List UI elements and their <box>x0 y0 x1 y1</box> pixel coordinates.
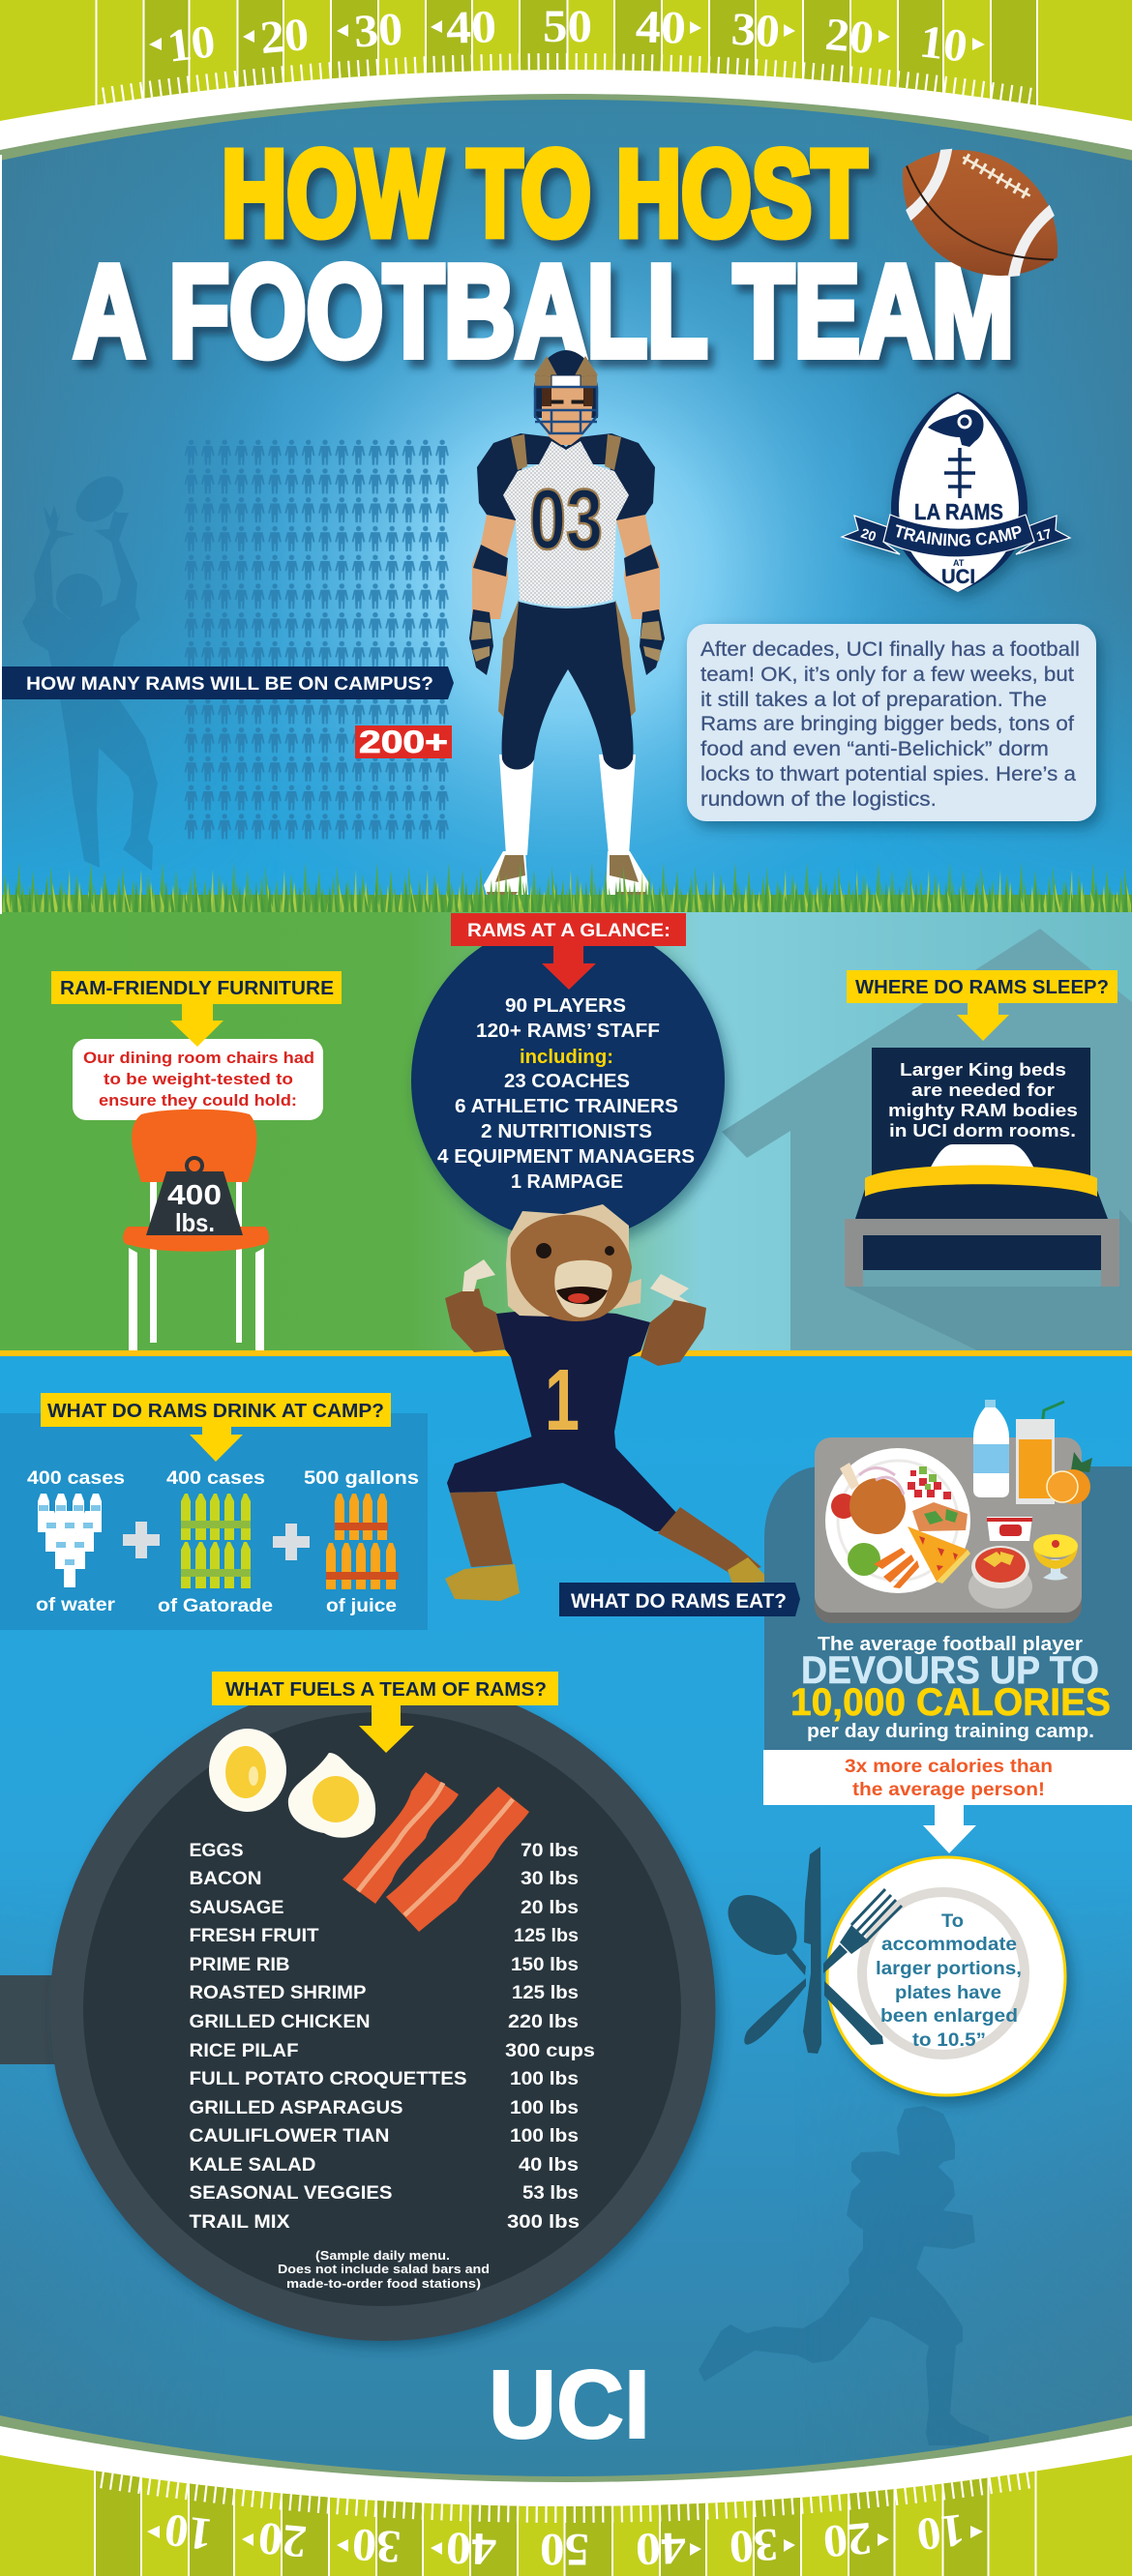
legs <box>447 1436 680 1531</box>
food list names: BACON <box>190 1869 261 1889</box>
onions <box>859 1468 904 1495</box>
fork tines <box>851 1889 902 1940</box>
pants <box>498 600 636 770</box>
chair text: ensure they could hold: <box>99 1091 297 1110</box>
labels top: 500 gallons <box>304 1468 419 1489</box>
food list names: FRESH FRUIT <box>190 1926 319 1946</box>
orange slice <box>1047 1471 1078 1502</box>
right arm <box>640 1298 706 1366</box>
heading <box>212 1672 558 1705</box>
arrow <box>359 1705 414 1753</box>
glance list: 1 RAMPAGE <box>511 1171 623 1193</box>
house silhouette <box>722 929 1132 1350</box>
bone <box>840 1463 859 1490</box>
fork head <box>840 1925 869 1954</box>
right glove <box>640 609 665 675</box>
food list amounts: 100 lbs <box>510 2098 579 2118</box>
panel: what do rams drink <box>0 1393 428 1630</box>
menu note: Does not include salad bars and <box>278 2262 490 2276</box>
panel: ram-friendly furniture: RAM-FRIENDLY FURNITURE <box>60 978 334 999</box>
badge label: AT: AT <box>953 558 965 568</box>
icon: cutlery <box>717 1847 902 2054</box>
header: rams at a glance: RAMS AT A GLANCE: <box>467 921 670 941</box>
food list amounts: 53 lbs <box>522 2183 579 2204</box>
panel: where do rams sleep: WHERE DO RAMS SLEEP? <box>855 977 1109 998</box>
divider: gold line <box>0 1350 1132 1356</box>
plate text: larger portions, <box>876 1959 1022 1979</box>
food list amounts: 100 lbs <box>510 2069 579 2089</box>
heading <box>847 970 1117 1003</box>
food list names: TRAIL MIX <box>190 2212 290 2233</box>
dessert cup <box>1033 1548 1078 1569</box>
footer: field and arcs <box>0 2415 1132 2576</box>
football laces emblem <box>944 448 975 498</box>
sauce lid <box>987 1518 1032 1522</box>
weight <box>146 1158 243 1237</box>
silhouette: player catching ball <box>22 467 158 871</box>
text block: intro: team! OK, it’s only for a few weeks, but <box>700 664 1074 686</box>
skewers <box>908 1470 951 1499</box>
banner: what do rams eat: WHAT DO RAMS EAT? <box>571 1590 787 1613</box>
menu note: made-to-order food stations) <box>286 2276 481 2291</box>
speech box <box>73 1039 323 1120</box>
orange <box>1056 1469 1090 1504</box>
tomato <box>831 1494 856 1519</box>
plate text: To <box>941 1911 964 1932</box>
panel: what fuels a team of rams <box>0 1672 716 2341</box>
logo: UCI: UCI <box>489 2351 650 2459</box>
plate text: accommodate <box>881 1935 1017 1955</box>
banner: what do rams eat <box>559 1583 800 1616</box>
text block: intro: food and even “anti-Belichick” dorm <box>700 738 1049 760</box>
food list amounts: 300 lbs <box>507 2212 580 2233</box>
eat text: The average football player <box>818 1634 1083 1655</box>
food list amounts: 30 lbs <box>521 1869 579 1889</box>
skewers greens <box>919 1466 937 1490</box>
heading <box>51 971 342 1004</box>
left arm <box>445 1288 505 1352</box>
sauce cup <box>987 1517 1032 1541</box>
socks <box>499 755 636 855</box>
text block: intro <box>687 624 1096 821</box>
glance list: 6 ATHLETIC TRAINERS <box>455 1096 678 1117</box>
head <box>506 1204 641 1321</box>
jersey number: 1 <box>545 1352 580 1449</box>
header: rams at a glance <box>451 913 686 990</box>
pizza <box>908 1526 968 1582</box>
chair text: Our dining room chairs had <box>83 1049 314 1067</box>
text block: intro: it still takes a lot of preparation. The <box>700 689 1047 711</box>
panel: what do rams eat: DEVOURS UP TO <box>801 1649 1099 1692</box>
badge label: UCI: UCI <box>941 566 975 588</box>
plus <box>273 1524 310 1560</box>
ram horn emblem <box>928 409 984 447</box>
text block: intro: rundown of the logistics. <box>700 788 937 811</box>
left shoe <box>484 851 528 905</box>
food list names: SAUSAGE <box>190 1898 284 1918</box>
bacon strips <box>343 1772 529 1932</box>
callout: 3x more calories <box>763 1750 1132 1805</box>
food list names: EGGS <box>190 1841 244 1861</box>
spoon bowl <box>717 1882 808 1968</box>
panel: where do rams sleep <box>845 970 1132 1350</box>
callout: 3x more calories: the average person! <box>852 1780 1045 1800</box>
title: HOW TO HOST <box>222 126 867 261</box>
straw <box>1040 1402 1064 1441</box>
right shoe detail <box>610 855 646 900</box>
carrots <box>874 1548 919 1588</box>
left edge sliver <box>0 155 2 914</box>
panel: stadium sky background <box>0 39 1132 914</box>
callout: 3x more calories: 3x more calories than <box>845 1757 1053 1777</box>
meat <box>849 1478 906 1534</box>
circle: rams at a glance <box>411 920 725 1241</box>
right fist <box>650 1274 690 1303</box>
panel: what do rams drink: WHAT DO RAMS DRINK AT CAMP? <box>47 1401 384 1422</box>
bed text: mighty RAM bodies <box>888 1101 1078 1120</box>
pizza crust <box>937 1550 970 1584</box>
food list amounts: 20 lbs <box>521 1898 579 1918</box>
food list names: RICE PILAF <box>190 2041 298 2061</box>
lemon top <box>1033 1534 1078 1557</box>
tray <box>815 1400 1092 1623</box>
arrow <box>190 1427 243 1462</box>
bed text <box>888 1060 1078 1140</box>
silhouette: running player <box>699 2106 989 2445</box>
food list names: CAULIFLOWER TIAN <box>190 2126 389 2147</box>
fruit highlight <box>983 1552 1014 1567</box>
bowl <box>971 1546 1029 1588</box>
illustration: football player <box>469 350 665 905</box>
plus <box>123 1522 160 1558</box>
menu note: (Sample daily menu. <box>315 2248 450 2263</box>
torso <box>496 1309 650 1454</box>
plate text: been enlarged <box>880 2006 1018 2027</box>
callout: 200+: 200+ <box>359 725 448 759</box>
food list names: SEASONAL VEGGIES <box>190 2183 393 2204</box>
bed text: in UCI dorm rooms. <box>889 1121 1076 1140</box>
plate <box>825 1448 970 1593</box>
title <box>74 126 1014 384</box>
panel: what fuels a team of rams: WHAT FUELS A TEAM OF RAMS? <box>225 1679 547 1701</box>
food list names: KALE SALAD <box>190 2155 315 2176</box>
left shoe detail <box>487 855 525 900</box>
food list amounts: 70 lbs <box>521 1841 579 1861</box>
knife <box>803 1847 821 2054</box>
text block: intro: Rams are bringing bigger beds, tons of <box>700 713 1074 735</box>
illustration: Rampage mascot <box>445 1204 771 1601</box>
food list amounts: 150 lbs <box>511 1955 579 1975</box>
pan inner <box>83 1712 681 2306</box>
food list amounts: 125 lbs <box>512 1983 579 2003</box>
right boot <box>728 1557 771 1584</box>
food list amounts: 125 lbs <box>514 1926 579 1946</box>
labels bottom: of juice <box>326 1596 397 1616</box>
glance list: 120+ RAMS’ STAFF <box>476 1021 660 1042</box>
fruit <box>975 1548 1026 1583</box>
left fist <box>462 1259 495 1291</box>
plate text <box>876 1911 1022 2051</box>
icon: plate callout <box>827 1857 1065 2095</box>
weight: lbs. <box>175 1208 215 1237</box>
chair text <box>83 1049 314 1110</box>
chair text: to be weight-tested to <box>104 1070 293 1088</box>
right shin <box>658 1507 761 1575</box>
bed shadow <box>845 1209 1132 1350</box>
left boot <box>445 1564 520 1601</box>
plate text: plates have <box>895 1983 1001 2003</box>
glove detail left <box>471 621 492 662</box>
spoon handle upper <box>787 1947 806 1975</box>
helmet <box>534 350 598 445</box>
labels bottom <box>36 1595 397 1616</box>
field header: top yard lines and arcs <box>0 0 1132 161</box>
bowl glass <box>968 1564 1032 1609</box>
plate text: to 10.5” <box>912 2030 986 2051</box>
ribbon text: training camp: TRAINING CAMP <box>896 524 1022 547</box>
straps <box>511 434 621 470</box>
labels top: 400 cases <box>27 1468 125 1489</box>
chair <box>123 1110 269 1350</box>
year left: 20 <box>859 525 879 545</box>
juice <box>1019 1439 1052 1498</box>
glance list: including: <box>520 1047 613 1068</box>
arm bands <box>473 545 659 577</box>
icon: water bottles <box>38 1494 102 1587</box>
shrimp salad <box>912 1502 968 1531</box>
panel: what do rams eat: per day during training camp. <box>807 1721 1094 1742</box>
banner: how many rams: HOW MANY RAMS WILL BE ON CAMPUS? <box>26 674 433 695</box>
cherry <box>1052 1540 1059 1548</box>
peas <box>848 1543 880 1576</box>
fork handle lower <box>744 1978 806 2045</box>
labels top <box>27 1468 419 1489</box>
bed text: are needed for <box>911 1081 1055 1100</box>
panel: what do rams eat: 10,000 CALORIES <box>790 1681 1111 1724</box>
dorm panel <box>872 1048 1090 1185</box>
panel: ram-friendly furniture <box>51 971 342 1350</box>
left shin <box>450 1492 513 1567</box>
plate rim <box>838 1461 958 1581</box>
sauce <box>999 1525 1022 1536</box>
egg one <box>209 1729 286 1812</box>
labels bottom: of water <box>36 1595 116 1615</box>
heading <box>41 1393 391 1427</box>
egg two <box>288 1753 375 1838</box>
text block: intro: locks to thwart potential spies. Here’s a <box>700 763 1076 785</box>
menu note <box>278 2248 490 2291</box>
spoon handle lower <box>824 1981 883 2045</box>
bed <box>845 1144 1119 1287</box>
jersey <box>503 441 629 607</box>
right shoe <box>606 851 650 905</box>
pan outer <box>50 1677 716 2341</box>
banner: how many rams <box>2 666 454 699</box>
icon grid: people representing 200+ rams <box>183 439 451 843</box>
bed text: Larger King beds <box>900 1060 1066 1080</box>
pizza toppings <box>919 1536 958 1571</box>
icon: Gatorade bottles <box>181 1494 251 1588</box>
food list names: ROASTED SHRIMP <box>190 1983 367 2003</box>
text block: intro: After decades, UCI finally has a football <box>700 638 1080 661</box>
dessert stem <box>1043 1559 1068 1581</box>
arrow <box>170 1004 223 1047</box>
leaves <box>1071 1452 1092 1472</box>
ribbon band <box>883 515 1034 557</box>
glance list: 90 PLAYERS <box>505 995 626 1017</box>
panel: blue lower background <box>0 1356 1132 2517</box>
food list amounts: 220 lbs <box>508 2012 579 2032</box>
glance list <box>437 995 695 1193</box>
arrow <box>957 1003 1009 1041</box>
year right: 17 <box>1034 525 1054 545</box>
glance list: 4 EQUIPMENT MANAGERS <box>437 1146 695 1168</box>
glance list: 23 COACHES <box>504 1071 630 1092</box>
food list names: GRILLED ASPARAGUS <box>190 2098 402 2118</box>
labels bottom: of Gatorade <box>158 1596 273 1616</box>
food list names <box>190 1841 466 2233</box>
panel: what do rams eat <box>764 1400 1132 1750</box>
shoulder pads <box>477 433 655 520</box>
glove detail right <box>640 621 662 662</box>
arms <box>472 515 660 619</box>
icon: football <box>875 119 1086 307</box>
weight: 400 <box>167 1180 222 1211</box>
food list amounts: 100 lbs <box>510 2126 579 2147</box>
arrow: white down <box>923 1805 976 1853</box>
food list names: GRILLED CHICKEN <box>190 2012 370 2032</box>
food list amounts: 40 lbs <box>519 2155 579 2176</box>
badge label: LA RAMS: LA RAMS <box>914 499 1003 524</box>
ribbon tails <box>842 516 1070 554</box>
icon: juice bottles <box>326 1494 399 1589</box>
jersey number: 03 <box>529 471 603 567</box>
bottle label <box>973 1444 1009 1473</box>
glance list: 2 NUTRITIONISTS <box>481 1121 652 1142</box>
greens in salad <box>924 1509 958 1525</box>
left glove <box>469 609 493 675</box>
pan handle <box>0 1975 58 2064</box>
grass strip <box>0 856 1132 914</box>
bottle cap <box>985 1400 996 1407</box>
badge: LA Rams training camp <box>840 392 1074 604</box>
fork handle upper <box>823 1944 848 1973</box>
water bottle <box>973 1400 1009 1497</box>
food list names: FULL POTATO CROQUETTES <box>190 2069 466 2089</box>
panel: dorm life section <box>0 912 1132 1350</box>
food list names: PRIME RIB <box>190 1955 290 1975</box>
food list amounts: 300 cups <box>505 2041 595 2061</box>
juice glass <box>1016 1419 1055 1504</box>
food list amounts <box>505 1841 595 2233</box>
labels top: 400 cases <box>166 1468 265 1489</box>
